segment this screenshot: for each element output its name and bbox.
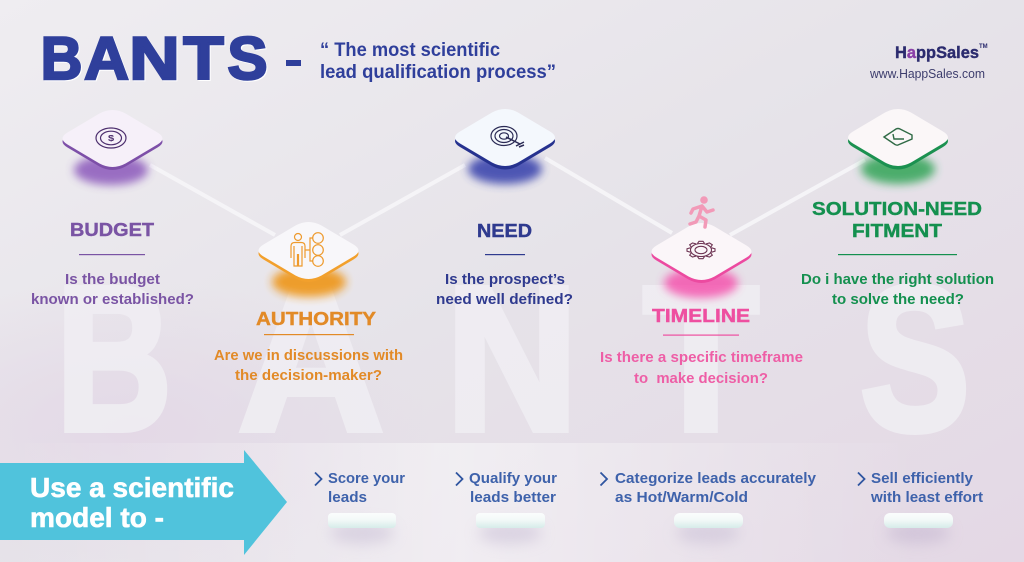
- label: need: need well defined?: [436, 291, 573, 308]
- label: need: Is the prospect’s: [445, 271, 565, 288]
- arrow banner: model to -: [30, 502, 164, 533]
- title: [41, 25, 301, 93]
- label: timeline: TIMELINE: [652, 306, 750, 326]
- node: timeline: [652, 223, 752, 298]
- node: authority: [258, 222, 358, 297]
- label: solution-need fitment: Do i have the right solution: [801, 271, 994, 288]
- label: solution-need fitment: FITMENT: [852, 221, 942, 241]
- title: N: [130, 26, 181, 93]
- connector lines: [150, 158, 865, 235]
- logo: HappSales: HappSales: [895, 43, 979, 62]
- watermark: BANTS letters: S: [860, 245, 970, 474]
- title: A: [85, 26, 130, 93]
- title: S: [227, 25, 268, 92]
- title: B: [42, 27, 83, 93]
- label: budget: known or established?: [31, 291, 194, 308]
- benefit: categorize leads: [600, 470, 817, 544]
- arrow banner: [0, 450, 287, 555]
- icon: people hierarchy: [291, 233, 323, 266]
- logo: HappSales: TM: [979, 44, 988, 50]
- icon: check badge: [884, 128, 912, 145]
- benefit: qualify your leads better: Qualify your: [469, 470, 557, 487]
- label: timeline: Is there a specific timeframe: [600, 349, 803, 366]
- node: solution-need fitment: [848, 109, 948, 184]
- label: authority: [214, 309, 403, 384]
- logo: HappSales: [869, 43, 988, 81]
- icon: gear: [687, 241, 715, 259]
- label: solution-need fitment: [801, 199, 994, 308]
- title: N: [129, 25, 180, 92]
- benefit: qualify your leads better: leads better: [470, 489, 556, 506]
- label: solution-need fitment: SOLUTION-NEED: [812, 199, 982, 219]
- label: authority: Are we in discussions with: [214, 347, 403, 364]
- icon: running person: [690, 196, 713, 227]
- title: A: [84, 25, 129, 92]
- benefit: sell efficiently: Sell efficiently: [871, 470, 974, 487]
- benefit: sell efficiently: [858, 470, 983, 544]
- node: need: [455, 109, 555, 184]
- watermark: BANTS letters: B: [56, 244, 172, 473]
- subtitle quote: “ The most scientific: [320, 40, 500, 61]
- benefit: categorize leads: Categorize leads accurately: [615, 470, 817, 487]
- benefit: sell efficiently: with least effort: [870, 489, 983, 506]
- label: timeline: to make decision?: [634, 370, 768, 387]
- benefit: score your leads: Score your: [328, 470, 405, 487]
- title: S: [228, 26, 269, 93]
- subtitle quote: lead qualification process”: [320, 62, 556, 83]
- title: T: [183, 26, 224, 92]
- icon: target with arrow: [491, 126, 524, 147]
- label: need: [436, 221, 573, 308]
- title: B: [41, 26, 82, 92]
- watermark: BANTS letters: [56, 244, 970, 474]
- benefit: score your leads: leads: [328, 489, 367, 506]
- label: budget: [31, 220, 194, 308]
- label: budget: Is the budget: [65, 271, 160, 288]
- benefit: score your leads: [315, 470, 405, 544]
- bottom band: [0, 443, 1024, 562]
- watermark: BANTS letters: T: [643, 244, 759, 473]
- label: authority: the decision-maker?: [235, 367, 382, 384]
- benefit: qualify your leads better: [456, 470, 557, 544]
- subtitle quote: [320, 40, 556, 83]
- title: T: [184, 27, 225, 93]
- benefit: categorize leads: as Hot/Warm/Cold: [615, 489, 748, 506]
- icon: dollar target: $: [108, 134, 115, 144]
- label: budget: BUDGET: [70, 220, 154, 240]
- arrow banner: Use a scientific: [30, 472, 234, 503]
- label: timeline: [600, 306, 803, 387]
- watermark: BANTS letters: N: [446, 245, 578, 474]
- label: solution-need fitment: to solve the need?: [832, 291, 964, 308]
- logo: HappSales: www.HappSales.com: [869, 67, 985, 81]
- watermark: BANTS letters: A: [238, 245, 384, 474]
- node: budget: [62, 110, 162, 185]
- label: need: NEED: [477, 221, 532, 241]
- label: authority: AUTHORITY: [256, 309, 376, 329]
